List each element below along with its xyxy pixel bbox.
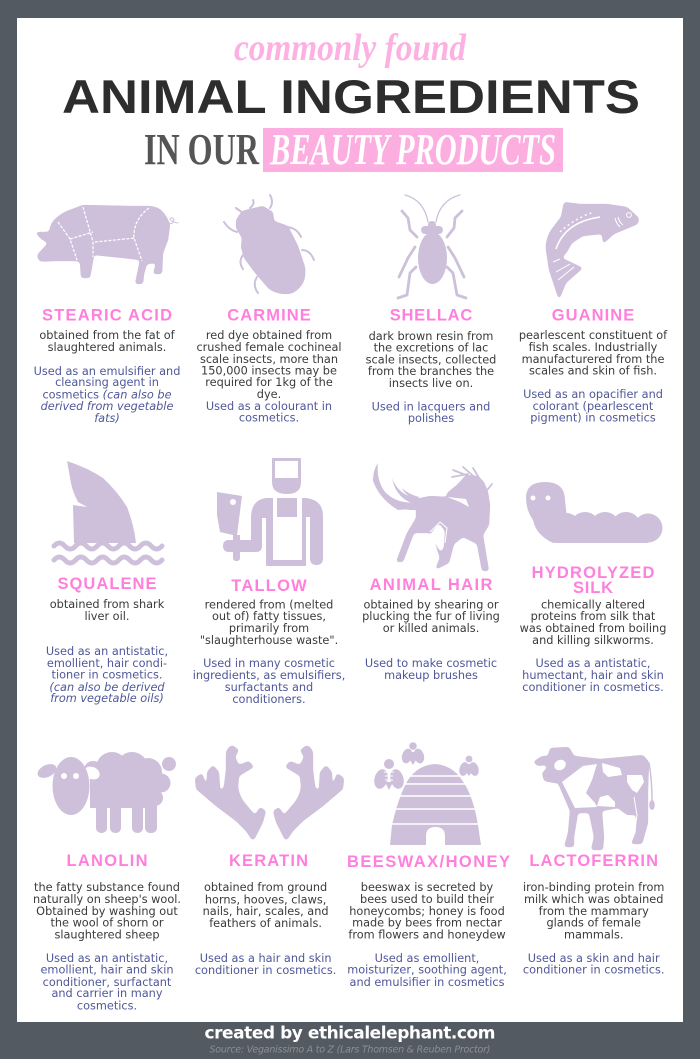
use text: cosmetics.: [77, 1000, 137, 1012]
source text: scales and skin of fish.: [529, 364, 657, 378]
icon: carmine beetle: [224, 195, 314, 294]
use text: Used in many cosmetic: [203, 657, 335, 670]
panel: lanolin: [33, 852, 181, 1012]
source text: or killed animals.: [383, 622, 479, 635]
icon: beehive with bees: [372, 742, 484, 845]
source text: and killing silkworms.: [532, 634, 654, 647]
panel: shellac: [366, 306, 496, 425]
heading: TALLOW: [231, 577, 307, 595]
source text: obtained by shearing or: [363, 598, 499, 612]
source text: [362, 598, 500, 635]
icon: pig with butcher cuts: [35, 205, 178, 284]
heading: LANOLIN: [66, 852, 148, 870]
bee: top middle: [400, 742, 426, 765]
icon: silkworm: [526, 482, 662, 543]
source text: [33, 881, 181, 942]
source text: made by bees from nectar: [352, 916, 502, 930]
use text: conditioner, surfactant: [43, 976, 172, 989]
icon: shellac lac insect: [398, 195, 466, 298]
use text: derived from vegetable: [41, 400, 173, 413]
icon: horse: [372, 463, 492, 571]
source text: from the branches the: [368, 365, 494, 378]
source text: insects live on.: [389, 377, 473, 390]
source text: pearlescent constituent of: [519, 329, 668, 342]
use text: Used as a antistatic,: [535, 657, 651, 670]
use text: [522, 657, 664, 694]
heading: HYDROLYZED: [532, 564, 654, 582]
source text: chemically altered: [541, 598, 645, 612]
use text: pigment) in cosmetics: [530, 412, 656, 424]
source text: the excretions of lac: [374, 342, 488, 354]
source text: milk which was obtained: [524, 893, 663, 906]
source text: glands of female: [546, 916, 641, 930]
bee: right: [458, 756, 480, 777]
source text: [519, 329, 668, 378]
source text: [196, 329, 342, 401]
title highlight: beauty products: [263, 125, 563, 174]
title line: in our: IN OUR: [144, 125, 260, 174]
source text: red dye obtained from: [206, 329, 332, 342]
source text: obtained from the fat of: [39, 329, 176, 342]
use text: [195, 952, 336, 977]
source text: plucking the fur of living: [362, 610, 500, 623]
use text: [34, 365, 180, 425]
use text: Used as an opacifier and: [523, 388, 663, 401]
source text: obtained from ground: [204, 881, 327, 894]
panel: keratin: [195, 852, 336, 977]
icon: antlers: [195, 745, 344, 840]
source text: obtained from shark: [50, 598, 165, 611]
source text: primarily from: [229, 622, 309, 635]
source text: out of) fatty tissues,: [212, 610, 326, 623]
panel: squalene: [46, 575, 168, 705]
use text: polishes: [408, 412, 454, 425]
source text: "slaughterhouse waste".: [200, 634, 338, 647]
title line: commonly found: commonly found: [234, 27, 467, 69]
use text: conditioner in cosmetics.: [523, 964, 664, 976]
use text: emollient, hair condi-: [47, 657, 167, 670]
source text: naturally on sheep's wool.: [33, 893, 181, 906]
use text: [193, 657, 345, 706]
panel: tallow: [193, 577, 345, 706]
use text: Used as an antistatic,: [46, 952, 168, 965]
source text: from the mammary: [539, 905, 649, 918]
use text: Used as a colourant in: [206, 400, 332, 413]
source text: dark brown resin from: [369, 330, 493, 343]
source text: scale insects, more than: [200, 353, 338, 366]
heading: BEESWAX/HONEY: [347, 853, 510, 871]
use text: [523, 388, 663, 424]
panel: animal hair: [362, 576, 500, 682]
source text: [523, 881, 664, 942]
source text: fish scales. Industrially: [529, 341, 658, 354]
panel: beeswax and honey: [347, 853, 510, 989]
icon: shark fin and waves: [54, 461, 162, 563]
title highlight: beauty products: BEAUTY PRODUCTS: [269, 125, 556, 174]
use text: Used as a skin and hair: [528, 952, 660, 965]
source text: beeswax is secreted by: [361, 881, 494, 894]
footer source: Source: Veganissimo A to Z (Lars Thomsen & Reuben Proctor): [210, 1044, 490, 1056]
use text: conditioner in cosmetics.: [195, 964, 336, 977]
title block: [62, 27, 640, 174]
use text: Used to make cosmetic: [365, 657, 497, 670]
heading: SILK: [573, 579, 613, 597]
source text: liver oil.: [85, 610, 129, 623]
panel: stearic acid: [34, 306, 180, 425]
use text: conditioner in cosmetics.: [522, 681, 664, 694]
heading: CARMINE: [227, 306, 311, 324]
use text: [523, 952, 664, 976]
heading: SQUALENE: [58, 575, 156, 593]
use text: Used as an antistatic,: [46, 645, 168, 658]
panel: carmine: [196, 306, 342, 424]
use text: Used as emollient,: [375, 952, 479, 965]
source text: [366, 330, 496, 390]
source text: required for 1kg of the: [205, 376, 333, 389]
use text: surfactants and: [225, 681, 313, 694]
source text: bees used to build their: [360, 893, 494, 906]
heading: KERATIN: [229, 852, 308, 870]
use text: emollient, hair and skin: [40, 964, 174, 976]
source text: manufacturered from the: [522, 353, 664, 366]
use text: Used as an emulsifier and: [34, 365, 180, 378]
use text: from vegetable oils): [50, 692, 164, 705]
use text: fats): [94, 412, 120, 425]
heading: STEARIC ACID: [42, 306, 172, 324]
source text: iron-binding protein from: [523, 881, 664, 894]
use text: Used as a hair and skin: [200, 952, 332, 965]
source text: [50, 598, 165, 623]
source text: slaughtered animals.: [48, 341, 166, 354]
icon: butcher with cleaver: [217, 458, 323, 566]
use text: Used in lacquers and: [372, 400, 490, 414]
use text: tioner in cosmetics.: [52, 668, 162, 682]
use text: [347, 952, 507, 989]
heading: [532, 564, 654, 597]
use text: [40, 952, 174, 1012]
source text: from flowers and honeydew: [348, 928, 506, 942]
use text: and carrier in many: [51, 987, 163, 1000]
use text: [372, 400, 490, 425]
use text: and emulsifier in cosmetics: [350, 976, 505, 989]
source text: feathers of animals.: [209, 917, 322, 930]
use text: humectant, hair and skin: [522, 669, 664, 682]
source text: [520, 598, 666, 647]
icon: guanine fish: [546, 202, 639, 300]
source text: [203, 881, 329, 930]
use text: moisturizer, soothing agent,: [347, 964, 507, 976]
source text: [39, 329, 176, 354]
heading: ANIMAL HAIR: [370, 576, 492, 594]
icon: sheep: [35, 752, 176, 833]
source text: the fatty substance found: [34, 881, 180, 894]
panel: lactoferrin: [523, 852, 664, 976]
heading: SHELLAC: [390, 306, 472, 324]
use text: makeup brushes: [384, 669, 478, 682]
source text: nails, hair, scales, and: [203, 905, 329, 918]
bee: large left: [372, 759, 406, 790]
footer credit: created by ethicalelephant.com: [204, 1024, 496, 1044]
source text: scale insects, collected: [366, 354, 496, 366]
source text: horns, hooves, claws,: [205, 894, 326, 906]
source text: [200, 598, 338, 647]
panel: hydrolyzed silk: [520, 564, 666, 694]
source text: Obtained by washing out: [36, 905, 178, 918]
use text: cleansing agent in: [55, 376, 159, 389]
use text: conditioners.: [232, 693, 306, 706]
panel: guanine: [519, 306, 668, 424]
heading: GUANINE: [552, 306, 634, 324]
icon: spotted cow: [533, 747, 655, 850]
use text: [46, 645, 168, 705]
use text: [206, 400, 332, 424]
use text: cosmetics.: [239, 412, 299, 424]
source text: the wool of shorn or: [50, 916, 164, 930]
source text: mammals.: [564, 928, 623, 942]
title line: animal ingredients: ANIMAL INGREDIENTS: [62, 70, 640, 123]
source text: proteins from silk that: [531, 610, 656, 623]
use text: ingredients, as emulsifiers,: [193, 669, 345, 682]
use text: cosmetics (can also be: [42, 388, 172, 402]
source text: crushed female cochineal: [196, 341, 342, 354]
use text: [365, 657, 497, 682]
use text: colorant (pearlescent: [533, 400, 654, 413]
source text: honeycombs; honey is food: [349, 905, 505, 918]
source text: slaughtered sheep: [54, 928, 160, 942]
source text: was obtained from boiling: [520, 622, 666, 635]
use text: (can also be derived: [49, 681, 165, 694]
source text: [348, 881, 506, 942]
source text: dye.: [257, 388, 281, 401]
source text: 150,000 insects may be: [201, 364, 337, 378]
source text: rendered from (melted: [205, 598, 333, 612]
heading: LACTOFERRIN: [529, 852, 658, 870]
